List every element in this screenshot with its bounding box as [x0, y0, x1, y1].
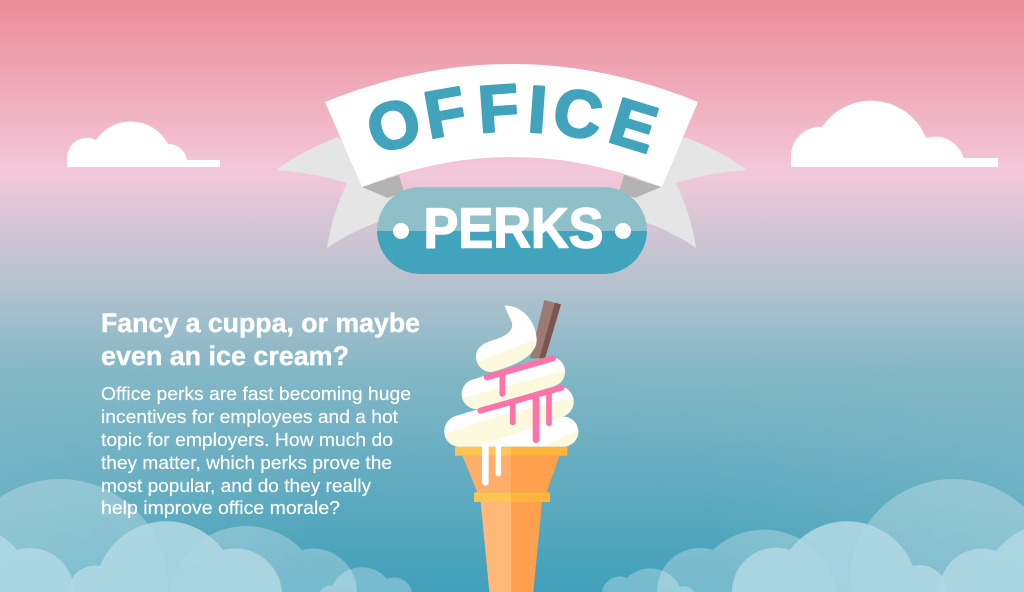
dot: right — [615, 223, 631, 239]
heading: OFFICE: O — [359, 82, 429, 168]
cloud: bottom left back large — [0, 479, 168, 592]
intro heading: even an ice cream? — [101, 341, 349, 371]
cloud: bottom right front — [732, 521, 947, 592]
chocolate flake — [530, 300, 561, 358]
heading: PERKS: PERKS — [424, 196, 604, 260]
intro paragraph: help improve office morale? — [101, 498, 340, 518]
cone top rim — [455, 447, 567, 456]
ribbon fold: left — [362, 175, 404, 198]
intro paragraph: incentives for employees and a hot — [101, 407, 398, 427]
heading: OFFICE: I — [526, 72, 549, 147]
pill: PERKS — [377, 187, 647, 274]
soft serve — [443, 306, 580, 447]
heading: OFFICE — [359, 70, 666, 168]
cloud: bottom left small — [320, 567, 412, 592]
cloud: bottom right back middle — [657, 530, 837, 592]
cone upper — [462, 456, 559, 492]
heading: OFFICE: E — [602, 83, 666, 167]
cloud: bottom far right front — [939, 529, 1024, 592]
intro paragraph: topic for employers. How much do — [101, 430, 393, 450]
pink sauce — [480, 358, 562, 440]
cloud: bottom far left front — [0, 535, 74, 592]
cloud: bottom left front — [68, 521, 282, 592]
cloud: bottom left back middle — [170, 526, 357, 592]
ribbon: white arch — [325, 64, 698, 187]
intro paragraph: most popular, and do they really — [101, 476, 371, 496]
cloud: bottom right small — [602, 568, 694, 592]
intro text block — [101, 308, 420, 518]
intro heading: Fancy a cuppa, or maybe — [101, 308, 420, 338]
white drips — [485, 445, 498, 482]
cloud: bottom right back large — [849, 479, 1024, 592]
pill lower half — [377, 231, 647, 274]
heading: OFFICE: F — [476, 70, 521, 146]
ribbon fold: right — [619, 175, 661, 198]
dot: left — [393, 223, 409, 239]
title banner — [276, 64, 747, 274]
cream shading — [443, 340, 580, 447]
intro paragraph — [101, 384, 411, 518]
pill upper half — [377, 187, 647, 231]
cone lower — [481, 502, 542, 592]
intro paragraph: they matter, which perks prove the — [101, 453, 392, 473]
ribbon tail: right — [623, 137, 747, 248]
intro paragraph: Office perks are fast becoming huge — [101, 384, 411, 404]
cone lower rim — [474, 492, 550, 502]
intro heading — [101, 308, 420, 371]
heading: OFFICE: C — [548, 73, 608, 154]
cloud: top left — [67, 122, 220, 167]
ribbon tail: left — [276, 137, 400, 248]
heading: OFFICE: F — [419, 72, 471, 152]
icon: ice cream cone — [443, 300, 580, 592]
cloud: top right — [791, 101, 998, 167]
